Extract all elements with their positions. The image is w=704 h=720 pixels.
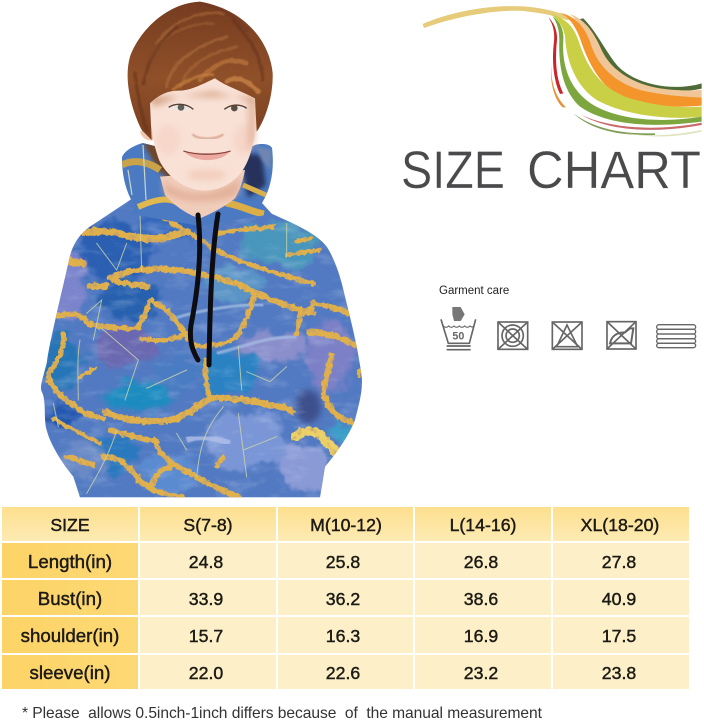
header row: L(14-16) (450, 515, 516, 535)
row: shoulder: 16.3 (326, 626, 360, 646)
gold marble veins (48, 213, 360, 497)
fold shadow in right pocket (296, 390, 321, 423)
orange band (560, 13, 702, 107)
hair (128, 2, 273, 140)
row: bust: 36.2 (326, 589, 360, 609)
hoodie body (41, 200, 362, 498)
row: shoulder: 17.5 (602, 626, 636, 646)
neck (160, 170, 245, 218)
orange thin band (551, 63, 566, 107)
drawstrings (190, 214, 218, 365)
boy's face and hair (128, 2, 273, 218)
row: bust (2, 580, 689, 615)
cheeks and shading (150, 92, 257, 180)
peach band (570, 14, 702, 99)
yellow-green band (550, 14, 702, 118)
row: shoulder: 15.7 (189, 626, 223, 646)
row: bust: 38.6 (464, 589, 498, 609)
hair strands (135, 4, 263, 130)
row: sleeve: 22.0 (189, 663, 223, 683)
row: length: Length(in) (28, 551, 112, 572)
icon: wash at 50 degrees (441, 307, 476, 350)
header row: S(7-8) (183, 515, 233, 535)
header row (2, 507, 689, 541)
red band (548, 17, 563, 94)
row: length (2, 543, 689, 578)
painted texture (42, 203, 361, 497)
row: sleeve: 23.8 (602, 663, 636, 683)
pale streaks (170, 305, 263, 320)
pale hairline veins (53, 213, 287, 493)
icon: do not iron (607, 322, 636, 349)
row: shoulder: 16.9 (464, 626, 498, 646)
hood (122, 143, 273, 226)
boy wearing marble hoodie photo (30, 2, 371, 500)
row: sleeve: 23.2 (464, 663, 498, 683)
thin gold line (423, 6, 577, 28)
icon: wash at 50 degrees: 50 (452, 330, 464, 342)
garment care heading: Garment care (439, 285, 509, 297)
icon: do not tumble dry (498, 322, 528, 349)
mouth (183, 151, 231, 160)
row: bust: Bust(in) (38, 588, 102, 609)
icon: do not bleach (552, 322, 582, 349)
face (150, 78, 257, 191)
row: shoulder: shoulder(in) (21, 625, 119, 646)
row: length: 25.8 (326, 552, 360, 572)
rainbow swoosh logo (423, 6, 702, 136)
row: sleeve (2, 655, 689, 689)
green band (553, 17, 702, 125)
eyes (169, 104, 247, 111)
header row: XL(18-20) (581, 515, 659, 535)
lower lines (582, 115, 702, 130)
row: length: 26.8 (464, 552, 498, 572)
header row: M(10-12) (310, 515, 382, 535)
dark green line (578, 18, 702, 91)
nose (193, 134, 223, 139)
row: bust: 33.9 (189, 589, 223, 609)
header row: SIZE (50, 515, 90, 535)
row: sleeve: 22.6 (326, 663, 360, 683)
icon: flat dry stack (657, 325, 696, 348)
row: sleeve: sleeve(in) (29, 662, 111, 683)
garment care icons (441, 307, 696, 350)
size table (2, 507, 689, 689)
row: shoulder (2, 617, 689, 653)
row: length: 24.8 (189, 552, 223, 572)
row: bust: 40.9 (602, 589, 636, 609)
row: length: 27.8 (602, 552, 636, 572)
title: SIZE CHART: SIZE (401, 141, 505, 200)
title: SIZE CHART: CHART (527, 141, 701, 200)
